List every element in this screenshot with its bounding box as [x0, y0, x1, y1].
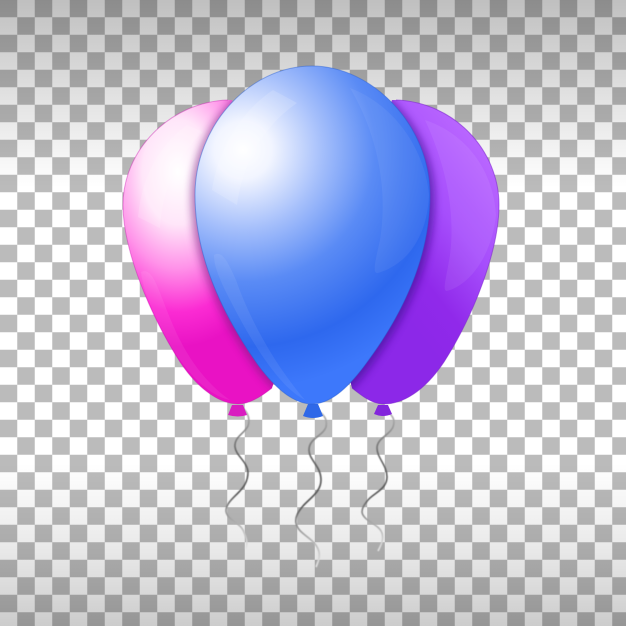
- knot: pink balloon: [228, 405, 247, 416]
- blue rim: [195, 66, 430, 404]
- pink rim: [123, 100, 272, 404]
- pink lower sheen: [141, 271, 230, 400]
- pink highlight: [138, 125, 203, 228]
- shadow cast on purple: [350, 100, 440, 390]
- balloon: purple: [350, 100, 500, 404]
- purple rim: [352, 100, 499, 404]
- blue lower sheen: [214, 254, 305, 400]
- balloon: pink: [122, 100, 274, 404]
- string: pink balloon: [226, 408, 249, 549]
- purple sheen: [425, 120, 496, 291]
- string: purple balloon: [362, 412, 394, 551]
- blue highlight: [266, 90, 296, 110]
- shadow cast on pink: [186, 100, 274, 390]
- knot: blue balloon: [303, 404, 323, 418]
- blue right sheen: [350, 88, 429, 273]
- knot: purple balloon: [374, 405, 392, 416]
- string: blue balloon: [296, 412, 326, 567]
- balloon: blue: [195, 66, 430, 404]
